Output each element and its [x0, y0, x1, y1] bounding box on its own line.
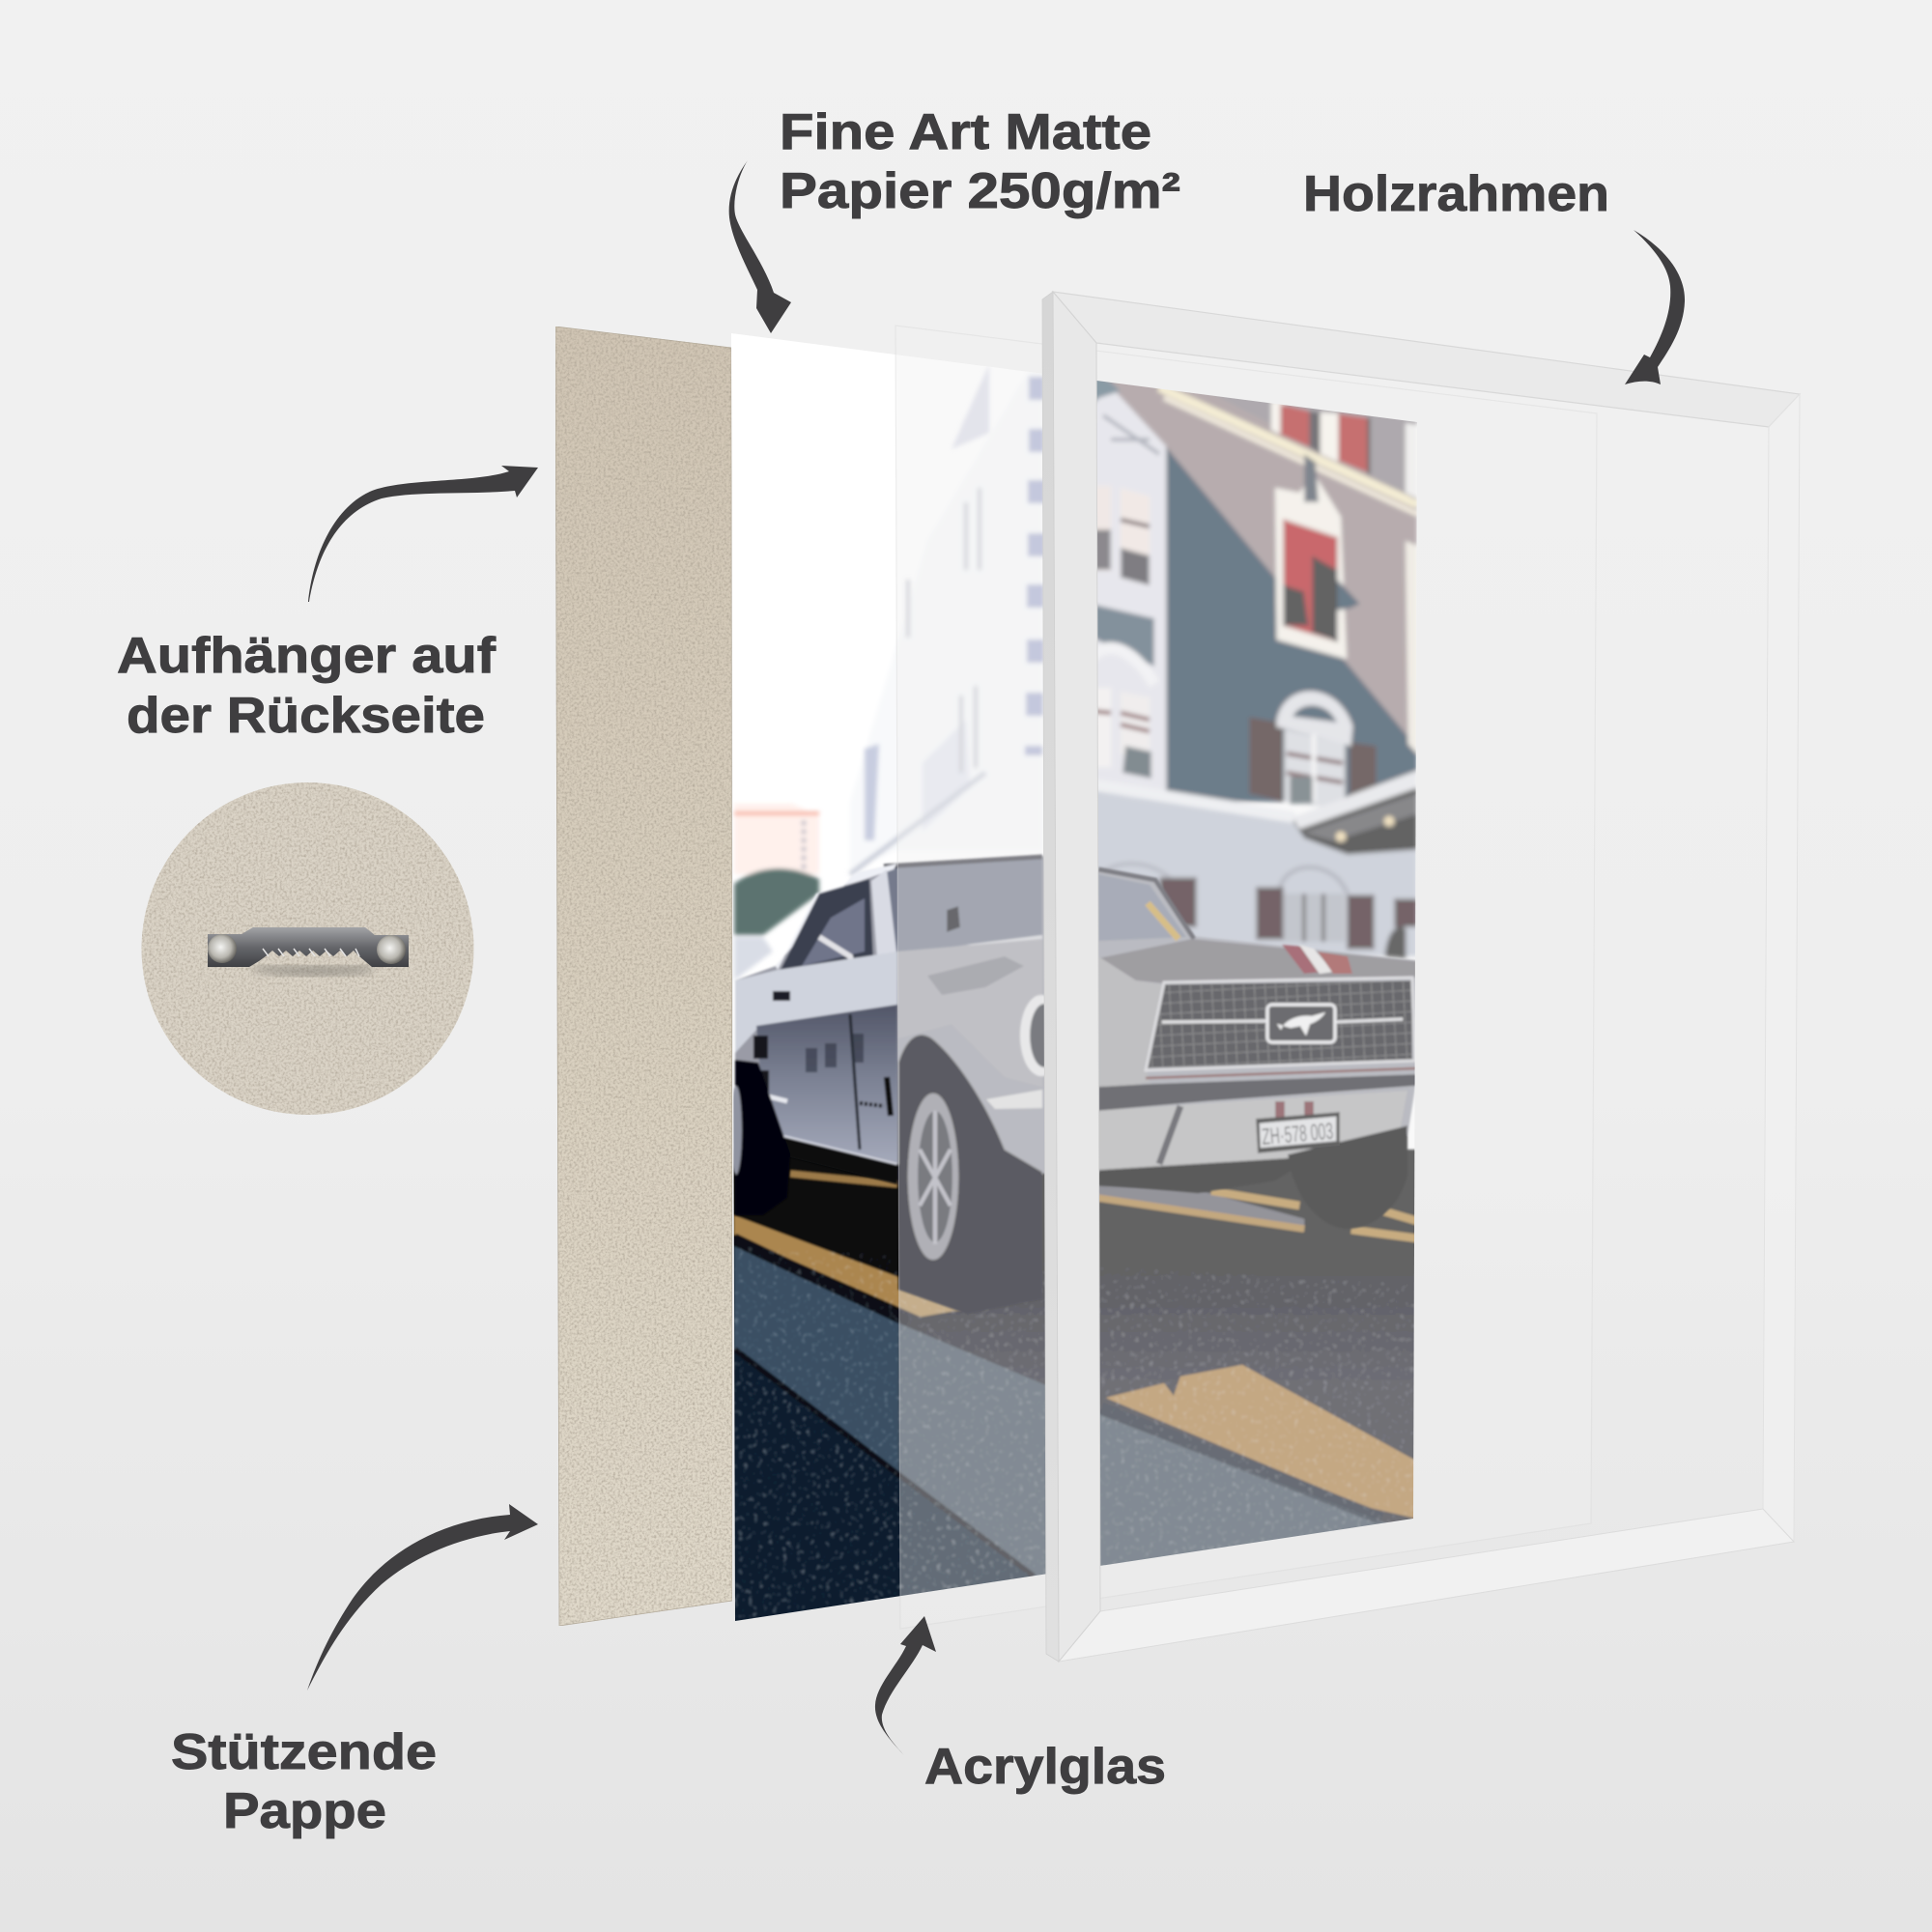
vintage car: [730, 856, 1416, 1314]
background pink house: [734, 804, 819, 874]
valance: [1098, 1091, 1407, 1170]
hanger shadow: [253, 966, 372, 976]
hanger teeth: [263, 949, 359, 956]
frame right edge: [1763, 394, 1800, 1542]
label: Aufhänger auf der Rückseite: der Rückseite: [127, 688, 485, 744]
label: Stützende Pappe: [171, 1724, 437, 1839]
metal hanger: [208, 927, 409, 967]
arrow: to cardboard top: [308, 466, 538, 602]
label: Fine Art Matte Papier: Fine Art Matte: [780, 104, 1151, 160]
panel: wooden frame: [1042, 292, 1800, 1662]
door: [756, 1005, 897, 1162]
front right wheel: [1288, 1125, 1407, 1229]
side window: [781, 879, 873, 970]
arrow: to cardboard bottom: [307, 1504, 538, 1690]
label: Fine Art Matte Papier: [780, 104, 1180, 219]
lower window: [1249, 717, 1283, 802]
label: Acrylglas: Acrylglas: [924, 1739, 1166, 1795]
panel: acrylic glass sheet: [895, 326, 1597, 1629]
wall: [1107, 383, 1417, 736]
road strips behind wheels: [1098, 1186, 1304, 1231]
frame side strip: [1042, 292, 1059, 1662]
label: Aufhänger auf der Rückseite: Aufhänger auf: [117, 628, 497, 684]
far white car: [734, 937, 773, 980]
hood: [1098, 939, 1416, 983]
canopy: [1293, 790, 1416, 858]
front chrome side: [986, 1090, 1042, 1109]
yellow line left: [734, 1215, 976, 1317]
label: Holzrahmen: Holzrahmen: [1303, 166, 1609, 222]
right windows: [1406, 541, 1417, 753]
fender: [1098, 956, 1164, 1092]
road and kerb: [724, 1150, 1420, 1633]
licence plate: [1256, 1112, 1340, 1153]
frame bottom edge: [1059, 1509, 1794, 1662]
car silhouette: [735, 856, 1416, 1174]
label: Fine Art Matte Papier: Papier 250g/m²: [780, 163, 1180, 219]
front wheel: [898, 1035, 1042, 1314]
arrow: to frame: [1625, 230, 1685, 384]
bumper: [1098, 1074, 1416, 1111]
grille: [1146, 980, 1412, 1068]
shoulder: [735, 952, 897, 1053]
arrow: to paper: [729, 160, 791, 333]
windshield: [884, 858, 1042, 956]
panel: supporting cardboard: [555, 327, 732, 1626]
big yellow marking: [1106, 1365, 1417, 1519]
frame left edge: [1053, 292, 1100, 1662]
mustang badge: [1267, 1005, 1335, 1042]
label: Aufhänger auf der Rückseite: [117, 628, 497, 744]
cornice: [1159, 387, 1417, 504]
under car shadow: [1098, 1156, 1314, 1193]
white left column: [1092, 372, 1166, 792]
label: Stützende Pappe: Pappe: [223, 1783, 386, 1839]
left column windows: [1097, 489, 1108, 525]
big window: [1275, 473, 1347, 659]
roof and pillars: [776, 864, 897, 970]
white building facade: [734, 348, 1045, 980]
blue shadow: [1166, 446, 1417, 802]
circle: sawtooth hanger detail: [141, 782, 473, 1115]
top shutters: [1271, 401, 1285, 437]
sill: [763, 1132, 897, 1184]
label: Stützende Pappe: Stützende: [171, 1724, 437, 1780]
licence plate: ZH·578 003: [1261, 1119, 1334, 1151]
arrow: to acrylic: [875, 1616, 936, 1755]
asphalt speckles: [734, 1352, 1053, 1633]
rear wheel: [735, 1060, 790, 1215]
sidewalk: [734, 1244, 899, 1472]
ground floor windows: [1159, 877, 1197, 927]
panel: fine art paper print: [724, 328, 1420, 1633]
gutter: [734, 1350, 1034, 1577]
cardboard circle: [141, 782, 473, 1115]
headlight: [1020, 995, 1063, 1076]
ledge and ground floor: [1092, 782, 1417, 956]
frame top edge: [1053, 292, 1800, 427]
rivets: [208, 934, 237, 963]
tree: [734, 868, 819, 935]
grey building: [1092, 367, 1417, 958]
